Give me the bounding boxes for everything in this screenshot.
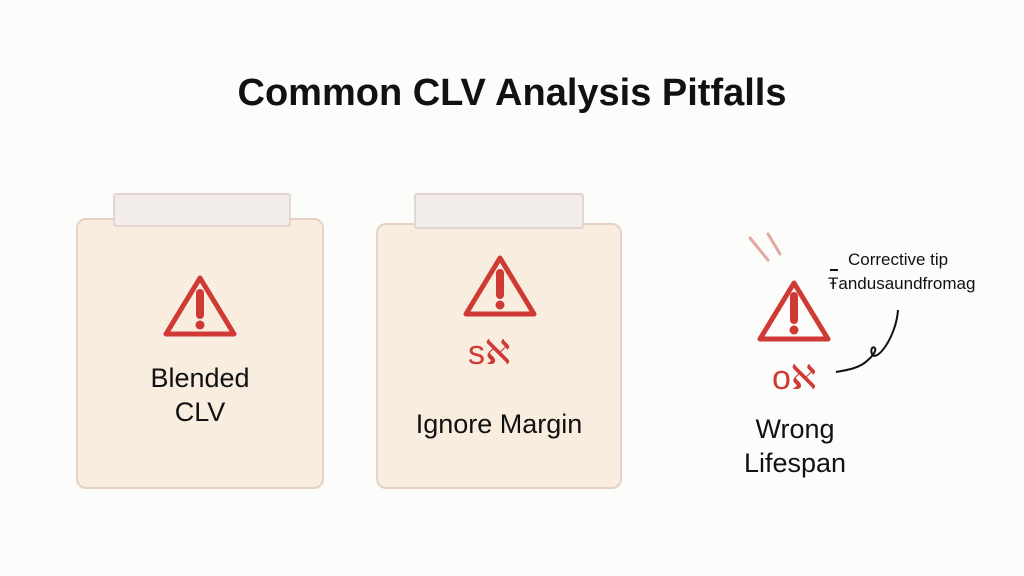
label: Ignore Margin bbox=[416, 409, 582, 439]
label: Blended bbox=[150, 363, 250, 393]
card background bbox=[376, 223, 622, 489]
icon: scribble: ᴏℵ bbox=[772, 359, 816, 397]
tab bbox=[113, 193, 291, 227]
icon: rays bbox=[748, 232, 782, 262]
callout: Ŧandusaundfromag bbox=[828, 274, 975, 293]
icon: scribble: sℵ bbox=[468, 334, 510, 372]
icon: warning bbox=[758, 280, 830, 342]
callout bbox=[828, 250, 975, 373]
icon: warning bbox=[164, 276, 236, 336]
panel: wrong lifespan bbox=[744, 232, 975, 478]
title: Common CLV Analysis Pitfalls bbox=[238, 72, 786, 114]
panel: ignore margin bbox=[376, 193, 622, 489]
panel: blended CLV bbox=[76, 193, 324, 489]
label: Wrong bbox=[755, 414, 835, 444]
tab bbox=[414, 193, 584, 229]
card background bbox=[76, 218, 324, 489]
label: Lifespan bbox=[744, 448, 846, 478]
label: CLV bbox=[175, 397, 225, 427]
label bbox=[150, 363, 250, 427]
icon: warning bbox=[464, 256, 536, 316]
label bbox=[744, 414, 846, 478]
callout: Corrective tip bbox=[848, 250, 948, 269]
